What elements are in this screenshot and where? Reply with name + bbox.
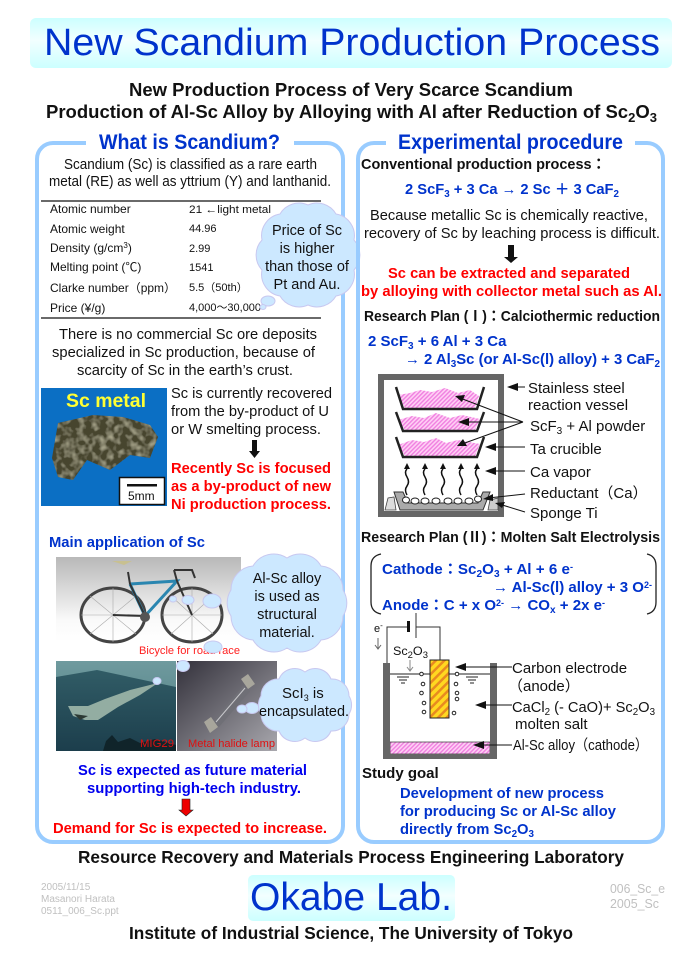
diagram labels: 2 (545, 707, 550, 718)
diagram: calciothermic reduction (381, 377, 648, 522)
text: future material: supporting high-tech industry. (87, 780, 301, 797)
intro text: metal (RE) as well as yttrium (Y) and lanthanid. (49, 173, 331, 190)
diagram: electrolysis (374, 613, 655, 759)
diagram labels: Ta crucible (530, 441, 602, 458)
institute name: Institute of Industrial Science, The University of Tokyo (129, 923, 573, 943)
footer note: left: Masanori Harata (41, 894, 115, 905)
arrow: down (504, 245, 518, 263)
diagram labels: 3 (557, 426, 563, 437)
text: no ore deposits (52, 326, 317, 379)
diagram labels: 2 (633, 707, 639, 718)
equations: electrolysis: Anode：C + x O (382, 597, 496, 614)
title banner: New Scandium Production Process (44, 22, 660, 64)
equations: electrolysis: O (482, 561, 494, 578)
diagram labels (508, 660, 655, 754)
photo: metal halide lamp: Metal halide lamp (188, 738, 275, 750)
diagram labels: Stainless steel (528, 380, 625, 397)
text: alloying (361, 265, 662, 300)
heading: study goal: Study goal (362, 765, 439, 782)
text: current recovery: from the by-product of U (171, 403, 329, 420)
equations: electrolysis: + Al + 6 e (500, 561, 570, 578)
text: recent focus: Ni production process. (171, 496, 331, 513)
diagram labels: Ca vapor (530, 464, 591, 481)
panel: experimental procedure (358, 131, 663, 842)
text: alloying: by alloying with collector metal such as Al. (361, 283, 662, 300)
text: study goal: O (517, 821, 529, 838)
callout: Al-Sc alloy: is used as (254, 589, 320, 605)
diagram labels: 3 (650, 707, 655, 718)
diagram labels: (- CaO)+ Sc (550, 699, 633, 716)
crucibles (396, 387, 484, 457)
properties table (41, 201, 321, 318)
subheading: conventional: Conventional production process： (361, 156, 606, 173)
equations: electrolysis: → Al-Sc(l) alloy + 3 O (493, 579, 644, 596)
diagram labels: + Al powder (562, 418, 645, 435)
callout: price of Sc: Pt and Au. (274, 277, 340, 293)
diagram labels: Sponge Ti (530, 505, 598, 522)
subheading: research plan II: Research Plan (Ⅱ)：Molten Salt Electrolysis (361, 529, 660, 546)
subtitle: 3 (650, 110, 657, 125)
caption: bicycle: Bicycle for road race (139, 645, 240, 657)
text: future material (78, 762, 307, 797)
equations: electrolysis: + 2x e (556, 597, 602, 614)
intro text: Scandium (Sc) is classified as a rare earth (64, 156, 317, 173)
diagram labels: CaCl (512, 699, 545, 716)
equation: calciothermic: 3 (451, 359, 457, 370)
circuit: - (380, 621, 383, 630)
text: no ore deposits: specialized in Sc production, because of (52, 344, 316, 361)
text: alloying: Sc can be extracted and separated (388, 265, 630, 282)
equations: electrolysis: 2- (496, 598, 504, 608)
circuit: 3 (423, 650, 428, 660)
electrolysis cell (383, 660, 497, 759)
text: current recovery: Sc is currently recovered (171, 385, 332, 402)
properties table: 3 (123, 241, 128, 250)
text: study goal: 2 (512, 829, 517, 840)
properties table: 44.96 (189, 223, 217, 235)
callout: price of Sc: Price of Sc (272, 223, 342, 239)
arrow: red down (179, 799, 193, 816)
equation: conventional: + 3 Ca → 2 Sc ＋ 3 CaF (450, 181, 614, 198)
footer note: right: 006_Sc_e (610, 881, 665, 896)
properties table: Atomic number (50, 202, 131, 216)
callout: Al-Sc alloy: material. (259, 625, 315, 641)
equation: calciothermic: → 2 Al (405, 351, 451, 368)
circuit: Sc (393, 644, 407, 658)
circuit: O (413, 644, 423, 658)
properties table: 21 ←light metal (189, 204, 271, 216)
photo: metal halide lamp (177, 661, 277, 751)
callout: ScI3: 3 (304, 693, 309, 703)
equation: calciothermic (368, 333, 660, 370)
text: study goal: for producing Sc or Al-Sc alloy (400, 803, 617, 820)
diagram labels: molten salt (515, 716, 588, 733)
diagram labels: Al-Sc alloy（cathode） (513, 737, 648, 754)
diagram labels (528, 380, 648, 522)
equation: conventional: 2 (614, 189, 619, 200)
equations: electrolysis: 3 (494, 569, 500, 580)
properties table: 1541 (189, 262, 213, 274)
subtitle: New Production Process of Very Scarce Scandium (129, 79, 573, 100)
heading: what is scandium: What is Scandium? (99, 131, 280, 154)
text: study goal: 3 (529, 829, 534, 840)
heading: experimental procedure: Experimental procedure (398, 131, 623, 154)
diagram labels: Reductant（Ca） (530, 485, 648, 502)
intro text (49, 156, 331, 190)
laboratory name: Resource Recovery and Materials Process Engineering Laboratory (78, 847, 624, 867)
text: demand: Demand for Sc is expected to increase. (53, 820, 327, 837)
callout: second cloud tail (153, 641, 222, 684)
callout: Al-Sc alloy: Al-Sc alloy (253, 571, 322, 587)
text: recent focus (171, 460, 331, 513)
footer note: left: 2005/11/15 (41, 882, 91, 893)
equations: electrolysis: - (602, 598, 605, 608)
equation: calciothermic: + 6 Al + 3 Ca (414, 333, 507, 350)
equation: conventional: 3 (444, 189, 450, 200)
properties table: 4,000～30,000 (189, 302, 261, 314)
equation: calciothermic: Sc (or Al-Sc(l) alloy) + 3 CaF (456, 351, 654, 368)
callout: price of Sc (256, 203, 360, 310)
equation: calciothermic: 2 (654, 359, 660, 370)
equations: electrolysis: → CO (504, 597, 550, 614)
subtitle (46, 79, 657, 125)
properties table: Melting point (℃) (50, 260, 141, 274)
panel: what is scandium (37, 131, 360, 842)
circuit: e (374, 623, 380, 635)
text: reactive: recovery of Sc by leaching process is difficult. (364, 225, 660, 242)
text: current recovery: or W smelting process. (171, 421, 321, 438)
equations: electrolysis: Cathode：Sc (382, 561, 475, 578)
properties table: ) (128, 241, 132, 255)
equation: calciothermic: 3 (408, 341, 414, 352)
subtitle: O (635, 101, 650, 122)
footer note: left: 0511_006_Sc.ppt (41, 906, 119, 917)
photo: MIG29: MIG29 (140, 738, 174, 750)
photo: bicycle (56, 557, 241, 642)
properties table: 2.99 (189, 243, 210, 255)
subheading: research plan I: Research Plan (Ⅰ)：Calciothermic reduction (364, 308, 660, 325)
Ca vapor arrows (404, 463, 480, 495)
callout: ScI3: encapsulated. (259, 703, 349, 720)
circuit (374, 613, 440, 671)
footer note: right: 2005_Sc (610, 896, 659, 911)
text: study goal: directly from Sc (400, 821, 513, 838)
photo: Sc metal: Sc metal (66, 390, 146, 412)
pointer arrows (455, 663, 512, 749)
callout: ScI3: is (309, 685, 324, 702)
diagram labels: O (638, 699, 650, 716)
text: study goal: Development of new process (400, 785, 604, 802)
text: recent focus: as a by-product of new (171, 478, 331, 495)
text: no ore deposits: There is no commercial Sc ore deposits (59, 326, 317, 343)
photo: Sc metal: 5mm (128, 489, 155, 503)
callout: Al-Sc alloy (170, 554, 347, 652)
diagram labels: （anode） (508, 678, 580, 695)
reductant tray (385, 492, 498, 510)
equations: electrolysis: 2 (477, 569, 483, 580)
properties table: 5.5（50th） (189, 281, 248, 294)
photo: Sc metal (41, 388, 167, 506)
properties table: Price (¥/g) (50, 301, 105, 315)
text: study goal (400, 785, 617, 840)
logo: Okabe Lab: Okabe Lab. (250, 876, 452, 919)
heading: main application: Main application of Sc (49, 534, 205, 551)
equations: electrolysis: x (550, 605, 556, 616)
pointer arrows (455, 383, 525, 512)
equations: electrolysis: 2- (644, 580, 652, 590)
footer note: right (610, 881, 665, 911)
properties table: Clarke number（ppm） (50, 281, 176, 295)
properties table: Atomic weight (50, 222, 125, 236)
callout: Al-Sc alloy: structural (257, 607, 317, 623)
callout: price of Sc: than those of (265, 259, 350, 275)
equations: electrolysis: - (570, 562, 573, 572)
footer note: left (41, 882, 119, 917)
text: recent focus: Recently Sc is focused (171, 460, 331, 477)
diagram labels: reaction vessel (528, 397, 628, 414)
text: current recovery (171, 385, 332, 438)
subtitle: Production of Al-Sc Alloy by Alloying with Al after Reduction of Sc (46, 101, 628, 122)
text: reactive: Because metallic Sc is chemically reactive, (370, 207, 648, 224)
circuit: 2 (408, 650, 413, 660)
callout: ScI3 (237, 669, 352, 741)
text: future material: Sc is expected as future material (78, 762, 307, 779)
callout: ScI3: ScI (282, 685, 304, 702)
subtitle: 2 (628, 110, 635, 125)
arrow: down (249, 440, 260, 458)
diagram labels: ScF (530, 418, 557, 435)
callout: price of Sc: is higher (280, 241, 335, 257)
equations: electrolysis (371, 554, 656, 616)
text: no ore deposits: scarcity of Sc in the earth’s crust. (77, 362, 293, 379)
equation: conventional: 2 ScF (405, 181, 445, 198)
photo: MIG29 (56, 661, 176, 751)
properties table: Density (g/cm (50, 241, 123, 255)
text: reactive (364, 207, 660, 242)
equation: calciothermic: 2 ScF (368, 333, 408, 350)
diagram labels: Carbon electrode (512, 660, 627, 677)
